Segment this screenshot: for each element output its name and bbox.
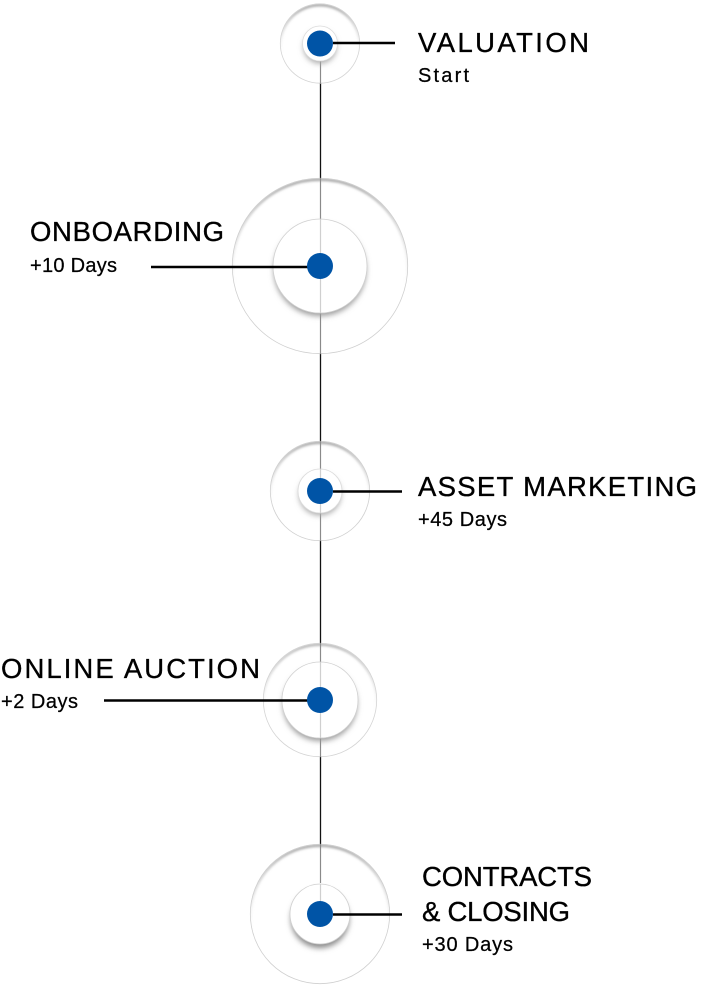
label: contracts and closing: [422, 861, 592, 956]
label: asset marketing: +45 Days: [418, 509, 507, 531]
label: online auction: ONLINE AUCTION: [1, 653, 260, 684]
connector: [151, 266, 310, 268]
blue dot: [307, 687, 333, 713]
label: asset marketing: ASSET MARKETING: [418, 471, 697, 502]
node: valuation: [280, 4, 395, 85]
label: valuation: [418, 27, 589, 87]
node: contracts and closing: [250, 844, 402, 986]
connector: [333, 42, 395, 44]
blue dot: [307, 478, 333, 504]
blue dot: [307, 901, 333, 927]
connector: [333, 913, 402, 916]
blue dot: [307, 253, 333, 279]
connector: [104, 699, 310, 702]
timeline spine: [320, 60, 322, 900]
label: contracts and closing: CONTRACTS: [422, 861, 592, 892]
label: onboarding: [30, 216, 224, 277]
node: onboarding: [151, 178, 408, 356]
label: asset marketing: [418, 471, 697, 531]
node: asset marketing: [270, 441, 402, 542]
label: onboarding: +10 Days: [30, 255, 117, 277]
label: contracts and closing: +30 Days: [422, 934, 513, 956]
connector: [333, 490, 402, 493]
label: onboarding: ONBOARDING: [30, 216, 224, 247]
label: contracts and closing: & CLOSING: [422, 896, 570, 927]
label: valuation: VALUATION: [418, 27, 589, 58]
node: online auction: [104, 643, 377, 758]
blue dot: [307, 30, 333, 56]
label: online auction: [1, 653, 260, 713]
label: valuation: Start: [418, 65, 469, 87]
label: online auction: +2 Days: [1, 691, 78, 713]
